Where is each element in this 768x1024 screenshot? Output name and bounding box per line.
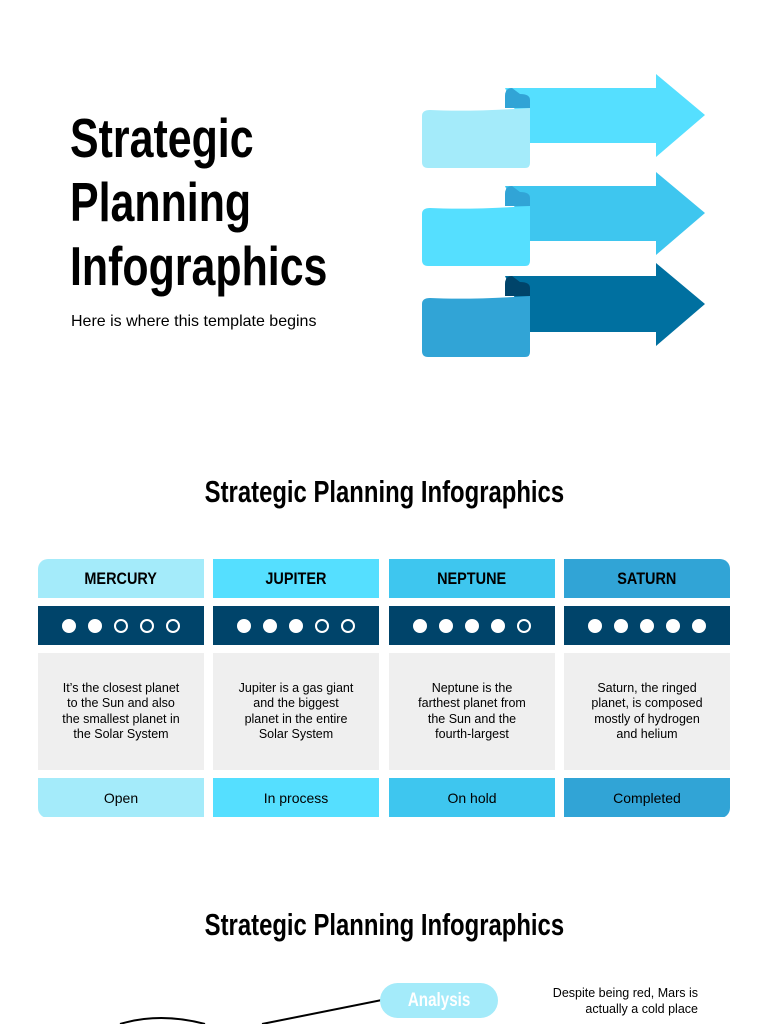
column: jupiter <box>213 559 379 817</box>
column: neptune: NEPTUNE <box>437 568 507 588</box>
pill: analysis: Analysis <box>408 990 470 1010</box>
column: saturn: Completed <box>613 790 681 806</box>
column: mercury: Open <box>104 790 138 806</box>
subtitle: Here is where this template begins <box>71 313 316 330</box>
column: jupiter: In process <box>264 790 328 806</box>
pill: analysis <box>380 983 498 1018</box>
column: saturn: Saturn, the ringed planet, is composed mostly of hydrogen and helium <box>591 680 703 741</box>
column: jupiter: JUPITER <box>265 568 327 588</box>
column: neptune: Neptune is the farthest planet from the Sun and the fourth-largest <box>418 680 526 741</box>
arrow 3 <box>422 263 705 357</box>
title <box>70 107 327 297</box>
arrow 2 <box>422 172 705 266</box>
table <box>38 559 730 817</box>
column: neptune: On hold <box>447 790 497 806</box>
title: Planning <box>70 171 251 233</box>
arrow 1 <box>422 74 705 168</box>
column: neptune <box>389 559 555 817</box>
title: Infographics <box>70 235 327 297</box>
column: jupiter: Jupiter is a gas giant and the biggest planet in the entire Solar System <box>239 680 353 741</box>
column: saturn: SATURN <box>617 568 677 588</box>
column: mercury <box>38 559 204 817</box>
text: mars: Despite being red, Mars is actually a cold place <box>553 986 698 1016</box>
column: saturn <box>564 559 730 817</box>
icon: ribbon arrows <box>422 74 705 357</box>
column: mercury: MERCURY <box>85 568 157 588</box>
title: Strategic <box>70 107 254 169</box>
column: mercury: It’s the closest planet to the Sun and also the smallest planet in the Solar System <box>62 680 180 741</box>
diagram lines <box>120 999 380 1024</box>
heading 2: Strategic Planning Infographics <box>204 474 564 509</box>
heading 3: Strategic Planning Infographics <box>204 907 564 942</box>
